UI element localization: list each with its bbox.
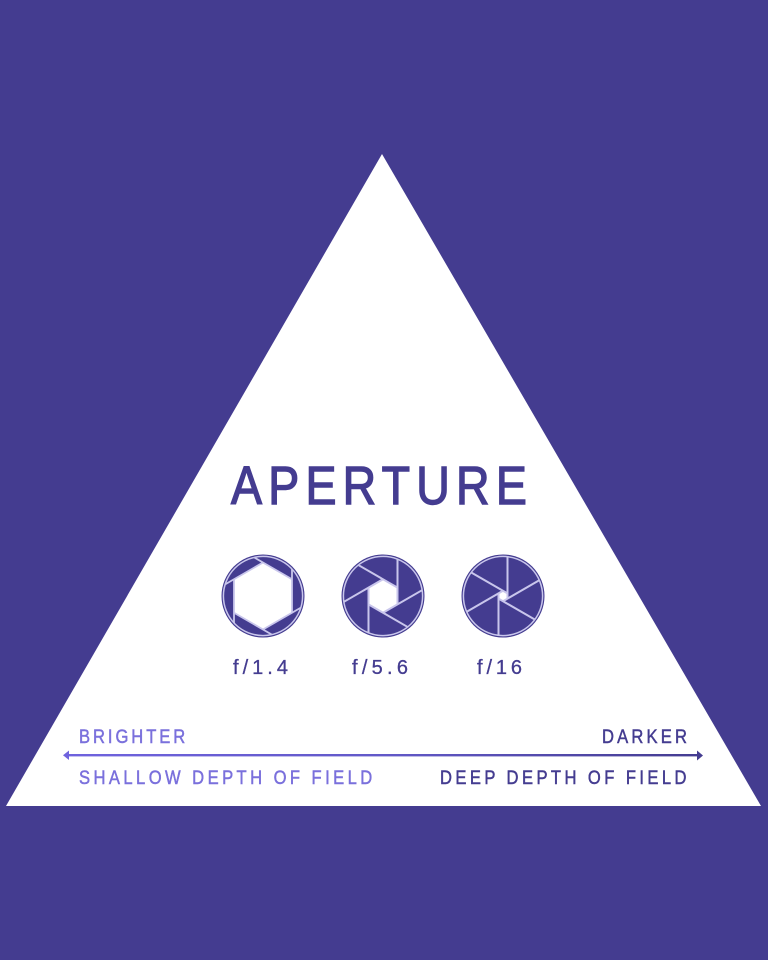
white triangle panel: [6, 154, 761, 806]
label: f/1.4: f/1.4: [233, 657, 288, 679]
label: deep depth of field: DEEP DEPTH OF FIELD: [440, 767, 687, 788]
label: brighter: BRIGHTER: [79, 726, 185, 747]
icon: aperture f/5.6: [342, 554, 424, 638]
label: f/5.6: f/5.6: [352, 657, 408, 679]
icon: aperture f/1.4: [222, 554, 304, 638]
arrow: brightness and depth scale: [63, 750, 703, 760]
label: f/16: f/16: [477, 657, 522, 679]
label: shallow depth of field: SHALLOW DEPTH OF FIELD: [79, 767, 372, 788]
label: darker: DARKER: [602, 726, 687, 747]
icon: aperture f/16: [462, 554, 544, 638]
title: APERTURE: [231, 455, 527, 516]
